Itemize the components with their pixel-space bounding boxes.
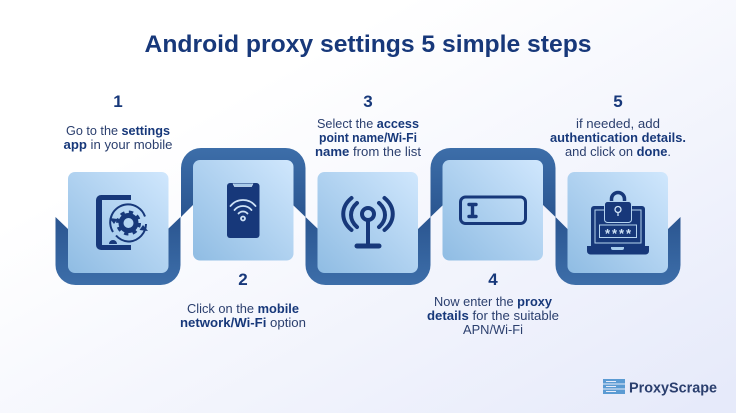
step 1 label (64, 92, 173, 152)
step 5 card (568, 172, 668, 273)
icon: server stack (603, 379, 625, 394)
step 2 label: network/Wi-Fi option (180, 316, 306, 330)
step 5 label: if needed, add (576, 117, 660, 131)
icon: phone with gear (96, 198, 148, 248)
icon: phone with wifi (227, 183, 260, 238)
icon: laptop with lock: **** (605, 226, 632, 241)
step 1 label: 1 (113, 92, 123, 111)
step 2 frame (181, 148, 306, 217)
step 5 label: and click on done. (565, 145, 671, 159)
step 2 card (193, 160, 294, 260)
step 2 label: Click on the mobile (187, 302, 299, 316)
logo: ProxyScrape: ProxyScrape (629, 380, 717, 396)
step 4 label: details for the suitable (427, 309, 559, 323)
step 4 card (442, 160, 543, 260)
step 4 label: Now enter the proxy (434, 295, 552, 309)
step 5 label: authentication details. (550, 131, 686, 145)
step 4 label (427, 270, 559, 337)
step 2 label: 2 (238, 270, 248, 289)
step 3 label: Select the access (317, 117, 419, 131)
step 4 label: APN/Wi-Fi (463, 323, 523, 337)
step 1 frame (56, 217, 180, 285)
step 5 label (550, 92, 686, 159)
step 3 frame (306, 217, 430, 285)
step 3 label: point name/Wi-Fi (319, 131, 417, 145)
step 1 label: app in your mobile (64, 138, 173, 152)
step 5 frame (556, 217, 680, 285)
step 1 card (68, 172, 168, 273)
step 5 label: 5 (613, 92, 623, 111)
step 2 label (180, 270, 306, 330)
step 3 card (318, 172, 418, 273)
step 3 label (315, 92, 422, 159)
step 1 label: Go to the settings (66, 124, 170, 138)
step 4 label: 4 (488, 270, 498, 289)
step 4 frame (430, 148, 556, 217)
step 3 label: name from the list (315, 145, 422, 159)
step 3 label: 3 (363, 92, 373, 111)
icon: input field (460, 197, 526, 224)
icon: antenna (343, 198, 393, 246)
title: Android proxy settings 5 simple steps (144, 31, 592, 58)
